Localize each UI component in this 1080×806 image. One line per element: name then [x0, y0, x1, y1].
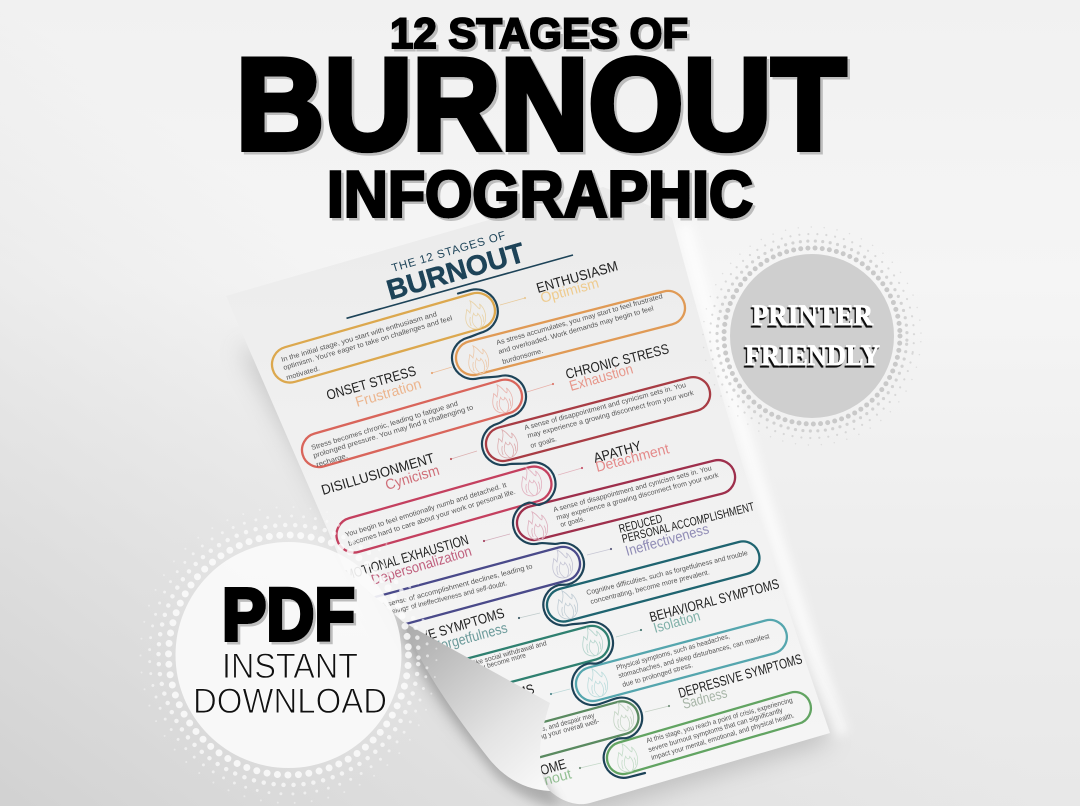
- capsule: [410, 698, 642, 790]
- heading: [617, 499, 756, 546]
- body text: Feelings of hopelessness, and despair may: [475, 712, 596, 751]
- title line 3: INFOGRAPHIC: [327, 158, 753, 230]
- body text: Stress becomes chronic, leading to fatigue and: [311, 400, 459, 452]
- capsule: [298, 376, 526, 471]
- subheading: Cynicism: [384, 463, 441, 494]
- stage 9 behavioral symptoms: [379, 575, 781, 715]
- body text: or goals.: [560, 516, 586, 529]
- heading: APATHY: [592, 437, 644, 466]
- page curl shadow: [400, 625, 560, 806]
- arrow: [450, 451, 477, 460]
- icon: flame: [549, 547, 575, 580]
- body text: As stress accumulates, you may start to feel frustrated: [496, 293, 664, 347]
- stage 11 depressive symptoms: [410, 650, 804, 790]
- paper highlight: [684, 225, 842, 735]
- capsule: [603, 688, 815, 778]
- heading: ENTHUSIASM: [534, 257, 620, 296]
- white circle: [176, 542, 402, 768]
- body text: prolonged pressure. You may find it challenging to: [313, 404, 474, 460]
- arrow: [645, 705, 670, 712]
- body text: impact your mental, emotional, and physical health.: [651, 712, 795, 762]
- panel: burnout poster sheet: [226, 187, 830, 806]
- subheading: Forgetfulness: [432, 620, 509, 656]
- icon: flame: [554, 588, 580, 621]
- heading: PHYSICAL SYMPTOMS: [407, 681, 536, 731]
- subheading: Depersonalization: [370, 544, 474, 589]
- capsule: [452, 287, 689, 379]
- arrow: [527, 383, 554, 392]
- icon: flame: [524, 509, 550, 542]
- icon: flame: [497, 429, 518, 458]
- body text: relationships as you become more: [429, 652, 527, 686]
- body text: Cognitive difficulties, such as forgetfulness and trouble: [586, 550, 749, 597]
- stage 2 onset stress: [324, 287, 689, 411]
- pdf label: PDF: [222, 573, 355, 656]
- body text: Behaviors like social withdrawal and: [442, 640, 548, 676]
- paper: [226, 187, 830, 804]
- badge: printer friendly: [694, 218, 930, 454]
- body text: severe burnout symptoms that can significantly: [648, 707, 784, 754]
- body text: or goals.: [530, 436, 558, 450]
- capsule: [379, 622, 613, 715]
- stage 10 physical symptoms: [407, 616, 791, 731]
- body text: and overloaded. Work demands may begin to feel: [498, 305, 655, 356]
- capsule: [349, 543, 584, 637]
- title line 2: BURNOUT: [236, 31, 846, 177]
- arrow: [587, 548, 612, 555]
- body text: At this stage, you reach a point of crisis, experiencing: [646, 697, 794, 745]
- arrow: [616, 629, 642, 637]
- icon: flame: [468, 345, 489, 374]
- arrow: [483, 534, 510, 542]
- subheading: Ineffectiveness: [624, 521, 711, 560]
- stage 6 emotional exhaustion: [336, 456, 739, 589]
- stage 4 disillusionment: [319, 373, 714, 498]
- heading: PERSONAL ACCOMPLISHMENT: [620, 499, 756, 546]
- poster kicker: THE 12 STAGES OF: [390, 230, 507, 275]
- gray circle: [730, 254, 894, 418]
- arrow: [518, 613, 540, 619]
- heading: COGNITIVE SYMPTOMS: [371, 604, 506, 659]
- poster title: [346, 230, 573, 318]
- badge: pdf instant download: [129, 496, 448, 806]
- heading: ONSET STRESS: [324, 362, 418, 403]
- subheading: Detachment: [594, 441, 671, 476]
- heading: REDUCED: [617, 511, 664, 536]
- arrow: [579, 763, 601, 769]
- subheading: Exhaustion: [568, 361, 635, 395]
- arrow: [550, 689, 570, 695]
- body text: A sense of disappointment and cynicism sets in. You: [553, 465, 713, 514]
- stage 1 enthusiasm: [268, 257, 620, 387]
- capsule: [482, 373, 714, 465]
- body text: stomachaches, and sleep disturbances, can manifest: [618, 633, 770, 680]
- heading: DEPRESSIVE SYMPTOMS: [676, 650, 804, 701]
- page curl flap: [403, 622, 550, 791]
- paper shadow: [238, 345, 832, 806]
- instant label: INSTANT: [222, 647, 358, 686]
- body text: Physical symptoms, such as headaches,: [616, 633, 731, 672]
- arrow: [431, 367, 452, 374]
- arrow: [558, 467, 583, 475]
- heading: EMOTIONAL EXHAUSTION: [336, 531, 470, 585]
- stage 8 cognitive symptoms: [371, 538, 763, 659]
- body text: feelings of ineffectiveness and self-doubt.: [386, 580, 508, 617]
- body text: In the initial stage, you start with enthusiasm and: [281, 311, 438, 364]
- capsule: [268, 289, 499, 387]
- subheading: Burnout: [521, 766, 573, 795]
- capsule: [332, 462, 556, 557]
- arrow: [500, 297, 526, 305]
- body text: A sense of accomplishment declines, leading to: [381, 563, 533, 610]
- title underline: [346, 255, 573, 318]
- printer label: PRINTER: [752, 299, 873, 332]
- stage 5 apathy: [332, 437, 671, 557]
- body text: A sense of disappointment and cynicism sets in. You: [524, 382, 687, 432]
- body text: optimism. You're eager to take on challenges and feel: [283, 315, 454, 372]
- body text: [429, 640, 548, 686]
- stage 7 reduced personal accomplishment: [349, 499, 756, 637]
- icon: flame: [584, 666, 610, 699]
- body text: due to prolonged stress.: [622, 662, 694, 689]
- body text: start impacting your overall well-: [502, 718, 601, 751]
- body text: becomes hard to care about your work or personal life.: [348, 489, 517, 548]
- subheading: Sadness: [681, 685, 729, 713]
- poster content: [268, 230, 815, 806]
- subheading: Optimism: [539, 275, 601, 307]
- body text: [311, 400, 474, 469]
- halftone ring: [694, 218, 930, 454]
- heading: CHRONIC STRESS: [564, 340, 670, 382]
- download label: DOWNLOAD: [193, 682, 387, 721]
- body text: motivated.: [286, 365, 321, 382]
- icon: flame: [579, 625, 605, 658]
- body text: may experience a growing disconnect from your work: [527, 390, 695, 440]
- body text: concentrating, become more prevalent.: [590, 569, 711, 606]
- stage 3 chronic stress: [298, 340, 670, 471]
- stage 12 burnout syndrome: [441, 688, 815, 806]
- halftone ring: [129, 496, 448, 806]
- navy winding path: [452, 289, 645, 778]
- body text: recharge.: [316, 453, 349, 469]
- icon: flame: [465, 300, 486, 330]
- capsule: [513, 456, 739, 544]
- body text: You begin to feel emotionally numb and detached. It: [345, 482, 508, 539]
- icon: flame: [492, 384, 513, 414]
- friendly label: FRIENDLY: [745, 339, 880, 372]
- title line 1: 12 STAGES OF: [390, 10, 688, 58]
- body text: may experience a growing disconnect from your work: [556, 472, 720, 522]
- heading: BEHAVIORAL SYMPTOMS: [648, 575, 781, 625]
- body text: [524, 382, 695, 450]
- subheading: Isolation: [652, 608, 702, 637]
- icon: flame: [521, 467, 542, 496]
- capsule: [543, 538, 763, 625]
- icon: flame: [610, 700, 636, 733]
- body text: burdonsome.: [502, 348, 544, 366]
- icon: flame: [614, 741, 640, 774]
- subheading: Frustration: [354, 376, 423, 411]
- title: [236, 10, 846, 230]
- heading: BURNOUT SYNDROME: [441, 755, 568, 806]
- poster headline: BURNOUT: [383, 237, 528, 306]
- capsule: [572, 616, 791, 705]
- heading: DISILLUSIONMENT: [319, 449, 436, 498]
